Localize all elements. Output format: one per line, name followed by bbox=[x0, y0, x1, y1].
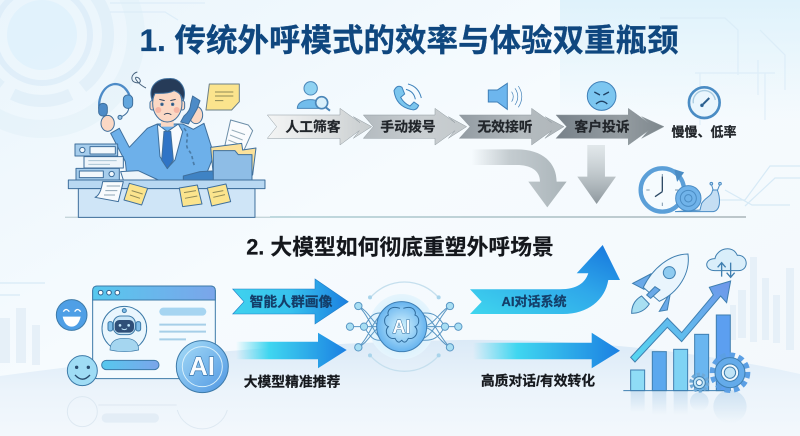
arrow: 手动拨号 bbox=[363, 108, 467, 145]
label: 慢慢、低率: 慢慢、低率 bbox=[671, 124, 737, 140]
illustration: overwhelmed office worker bbox=[65, 72, 275, 217]
label: 高质对话/有效转化: 高质对话/有效转化 bbox=[481, 372, 595, 388]
icon: clock and snail bbox=[641, 168, 721, 212]
label: 大模型精准推荐: 大模型精准推荐 bbox=[244, 374, 340, 390]
icon: angry face bbox=[587, 82, 616, 110]
label: 智能人群画像: 智能人群画像 bbox=[250, 294, 333, 310]
AI coin label: AI bbox=[189, 351, 215, 381]
icon: phone bbox=[394, 84, 421, 110]
section heading: 2. 大模型如何彻底重塑外呼场景 bbox=[246, 234, 554, 260]
arrow labels bbox=[285, 118, 630, 134]
process arrows bbox=[267, 108, 664, 207]
icon: AI brain network bbox=[346, 282, 462, 371]
arrow: high-quality conversion bbox=[473, 333, 620, 368]
title: 1. 传统外呼模式的效率与体验双重瓶颈 bbox=[139, 22, 679, 58]
icon: rocket bbox=[632, 254, 688, 313]
app window bbox=[93, 286, 215, 379]
divider bbox=[270, 216, 746, 218]
arrow: precise recommendation bbox=[236, 333, 347, 368]
arrow labels: 手动拨号 bbox=[380, 118, 436, 134]
arrow labels: 人工筛客 bbox=[285, 118, 341, 134]
chart: growth bars, arrow, rocket, cloud and gears bbox=[623, 249, 747, 423]
icon: cloud bbox=[707, 249, 746, 277]
icon: gauge bbox=[689, 87, 720, 118]
arrow labels: 客户投诉 bbox=[574, 118, 630, 134]
panel: AI chat window bbox=[56, 286, 228, 393]
arrow: 客户投诉 bbox=[556, 108, 664, 145]
icon: person search bbox=[297, 82, 330, 111]
reflections bbox=[67, 397, 227, 429]
arrow: 智能人群画像 bbox=[233, 279, 348, 324]
arrow: 无效接听 bbox=[459, 108, 564, 145]
smile top bbox=[56, 300, 87, 330]
AI coin bbox=[176, 341, 228, 393]
brain label: AI bbox=[392, 317, 410, 337]
label: AI对话系统: AI对话系统 bbox=[501, 294, 567, 309]
arrow labels: 无效接听 bbox=[477, 118, 533, 134]
smile bottom bbox=[67, 356, 97, 386]
robot avatar bbox=[102, 306, 147, 352]
arrow: straight grey down bbox=[577, 145, 616, 204]
icon: speaker bbox=[488, 83, 522, 109]
arrow: curved grey bbox=[472, 149, 567, 207]
arrow: 人工筛客 bbox=[267, 108, 372, 145]
arrow: AI dialogue system rising bbox=[470, 245, 620, 314]
